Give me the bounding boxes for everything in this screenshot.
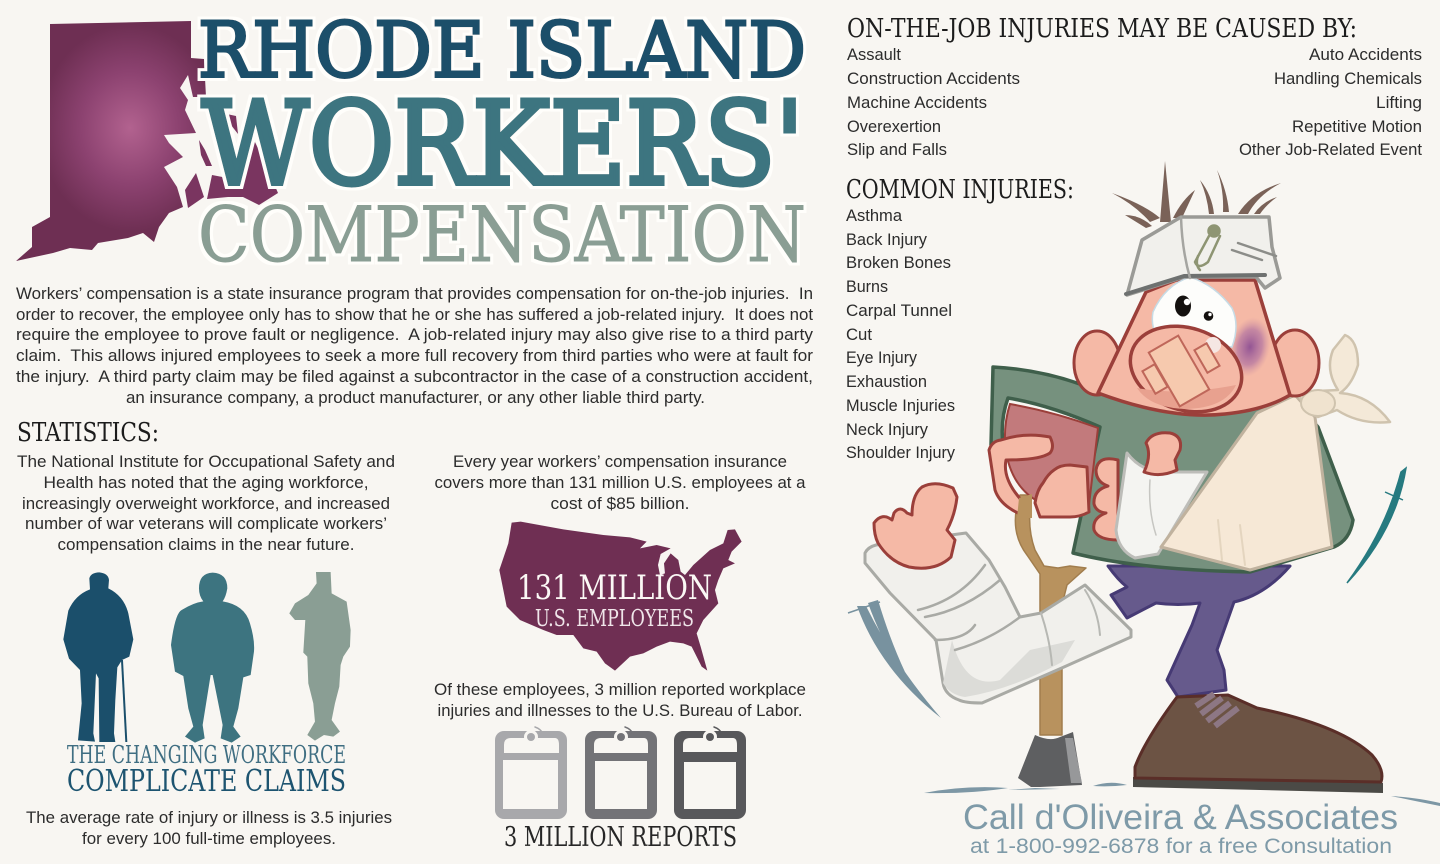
list: common injuries [846, 207, 956, 462]
text: injury rate: The average rate of injury or illness is 3.5 injuries [26, 809, 392, 827]
title line: Compensation: COMPENSATION [198, 190, 806, 279]
raised hand [874, 484, 957, 568]
shoe [1133, 694, 1383, 793]
sling knot [1301, 390, 1335, 416]
text: aging workforce: number of war veterans will complicate workers’ [25, 515, 387, 533]
caption: 3 million reports: 3 MILLION REPORTS [504, 822, 737, 853]
clipboard 2 [585, 727, 657, 819]
text: aging workforce: compensation claims in the near future. [58, 536, 354, 554]
list: common injuries: Exhaustion [846, 373, 927, 391]
map: Rhode Island state shape [16, 21, 278, 261]
map: United States with 131 million [499, 522, 742, 671]
crutch top through hand [1017, 494, 1032, 518]
ears [1074, 330, 1319, 396]
icon: three clipboards [495, 727, 746, 819]
hair [1112, 161, 1281, 228]
text: reported injuries: Of these employees, 3 million reported workplace [434, 681, 806, 699]
fingers [1035, 465, 1089, 517]
thumb [1144, 433, 1181, 475]
list: common injuries: Carpal Tunnel [846, 302, 952, 320]
list: causes right column: Auto Accidents [1309, 46, 1422, 64]
map: United States with 131 million: U.S. EMPLOYEES [535, 606, 694, 632]
list: common injuries: Shoulder Injury [846, 444, 956, 462]
safety pin [1195, 226, 1220, 270]
list: common injuries: Broken Bones [846, 254, 951, 272]
caption: changing workforce: COMPLICATE CLAIMS [67, 764, 346, 799]
leg cast [865, 533, 1131, 703]
shirt [991, 367, 1353, 572]
list: common injuries: Burns [846, 278, 888, 296]
list: causes right column: Repetitive Motion [1292, 118, 1422, 136]
call to action: at 1-800-992-6878 for a free Consultation [970, 835, 1392, 858]
eye [1152, 277, 1236, 347]
caption: changing workforce [67, 741, 346, 799]
text: annual coverage [434, 453, 806, 513]
intro paragraph: an insurance company, a product manufacturer, or any other liable third party. [126, 389, 705, 407]
intro paragraph [16, 285, 814, 407]
list: causes right column: Other Job-Related Event [1239, 141, 1422, 159]
caption: changing workforce: THE CHANGING WORKFORCE [67, 741, 346, 769]
list: causes left column: Overexertion [847, 118, 941, 136]
standing leg and hips [1108, 566, 1290, 697]
intro paragraph: claim. This allows injured employees to seek a more full recovery from third parties who were at fault for [16, 347, 814, 365]
heading: on-the-job causes: ON-THE-JOB INJURIES MAY BE CAUSED BY: [847, 14, 1357, 44]
heading: common injuries: COMMON INJURIES: [846, 175, 1074, 205]
intro paragraph: require the employee to prove fault or negligence. A job-related injury may also give rise to a third party [16, 326, 814, 344]
arm cast [1116, 453, 1207, 558]
map: United States with 131 million: 131 MILLION [517, 568, 712, 608]
call to action [963, 798, 1398, 858]
motion lines and ground strokes [848, 468, 1440, 806]
icon: saluting soldier silhouette [289, 572, 351, 741]
title line: Rhode Island: RHODE ISLAND [198, 6, 806, 94]
head [1098, 280, 1290, 415]
list: causes right column: Handling Chemicals [1274, 70, 1422, 88]
list: causes right column: Lifting [1376, 94, 1422, 112]
list: common injuries: Cut [846, 326, 872, 344]
list: causes left column [847, 46, 1020, 159]
text: reported injuries: injuries and illnesses to the U.S. Bureau of Labor. [438, 702, 802, 720]
text: aging workforce: The National Institute for Occupational Safety and [17, 453, 395, 471]
crutch [1015, 495, 1086, 735]
bandage on nose [1142, 336, 1220, 406]
list: common injuries: Muscle Injuries [846, 397, 955, 415]
text: injury rate: for every 100 full-time employees. [82, 830, 336, 848]
head bandage [1126, 217, 1280, 295]
text: injury rate [26, 809, 392, 848]
text: aging workforce [17, 453, 395, 554]
title [198, 6, 806, 279]
icon: overweight person silhouette [171, 573, 254, 743]
arm sling [1161, 335, 1390, 570]
list: common injuries: Asthma [846, 207, 903, 225]
intro paragraph: Workers’ compensation is a state insurance program that provides compensation for on-the-job injuries. In [16, 285, 813, 303]
list: common injuries: Back Injury [846, 231, 928, 249]
list: causes right column [1239, 46, 1422, 159]
nose [1119, 312, 1253, 426]
text: annual coverage: Every year workers’ compensation insurance [453, 453, 787, 471]
crutch rubber tip [1018, 732, 1082, 787]
call to action: Call d'Oliveira & Associates [963, 798, 1398, 837]
inner sleeve [1005, 404, 1098, 505]
text: aging workforce: increasingly overweight workforce, and increased [22, 495, 390, 513]
list: common injuries: Eye Injury [846, 349, 918, 367]
arm fingers [1094, 459, 1118, 540]
text: annual coverage: covers more than 131 million U.S. employees at a [434, 474, 806, 492]
heading: statistics: STATISTICS: [17, 418, 159, 448]
text: aging workforce: Health has noted that the aging workforce, [44, 474, 368, 492]
text: annual coverage: cost of $85 billion. [550, 495, 690, 513]
thumb and palm [989, 435, 1052, 514]
list: causes left column: Construction Accidents [847, 70, 1020, 88]
list: causes left column: Slip and Falls [847, 141, 947, 159]
list: causes left column: Machine Accidents [847, 94, 987, 112]
clipboard 1 [495, 727, 567, 819]
list: common injuries: Neck Injury [846, 421, 929, 439]
intro paragraph: the injury. A third party claim may be filed against a subcontractor in the case of a construction accident, [16, 368, 813, 386]
bruise [1224, 313, 1276, 381]
icon: old man silhouette [63, 572, 133, 742]
hand gripping crutch [989, 435, 1089, 518]
clipboard 3 [674, 727, 746, 819]
illustration: injured cartoon worker [848, 161, 1440, 806]
intro paragraph: order to recover, the employee only has to show that he or she has suffered a job-related injury. It does not [16, 306, 813, 324]
list: causes left column: Assault [847, 46, 901, 64]
text: reported injuries [434, 681, 806, 720]
title line: Workers': WORKERS' [202, 78, 804, 210]
